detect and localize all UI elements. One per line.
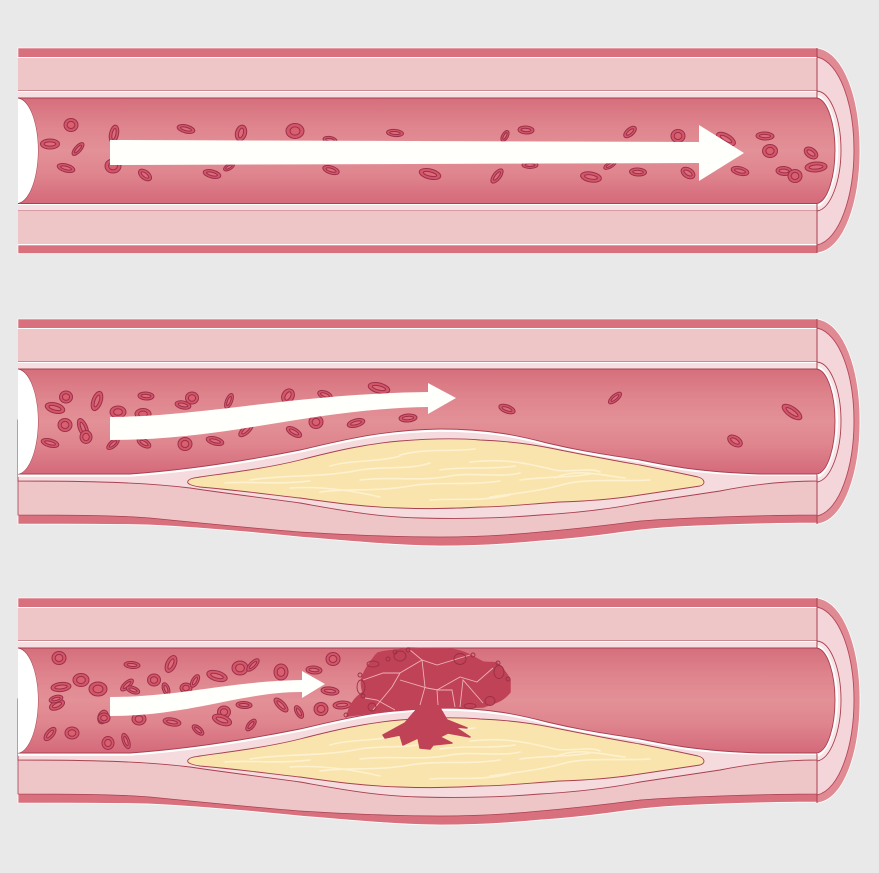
- artery wall and plaque: [18, 420, 817, 546]
- end cap: [817, 598, 860, 803]
- panel: healthy artery: [18, 48, 860, 254]
- opening at left end: [18, 648, 38, 753]
- clot edge cells: [344, 648, 510, 717]
- red blood cells, backed up: [42, 652, 351, 750]
- lumen, blocked: [18, 648, 835, 753]
- arrow: strong blood flow: [110, 125, 744, 181]
- red blood cells, healthy flow: [40, 118, 827, 185]
- opening at left end: [18, 370, 38, 474]
- artery wall, healthy: [18, 48, 860, 254]
- red blood cells, reduced flow: [40, 380, 804, 452]
- artery wall, upper: [18, 319, 817, 369]
- end cap: [817, 319, 860, 524]
- panel: artery with plaque and clot: [18, 598, 860, 825]
- blood clot: [344, 648, 510, 749]
- lumen, healthy: [18, 98, 835, 204]
- clot fibrin strands: [363, 650, 493, 710]
- arrow: minimal blood flow: [110, 671, 325, 716]
- opening at left end: [18, 98, 38, 203]
- panel: artery with plaque: [18, 319, 860, 546]
- lumen, narrowed: [18, 369, 835, 474]
- artery wall and plaque: [18, 699, 817, 825]
- arrow: reduced blood flow: [110, 383, 456, 440]
- artery wall, upper: [18, 598, 817, 648]
